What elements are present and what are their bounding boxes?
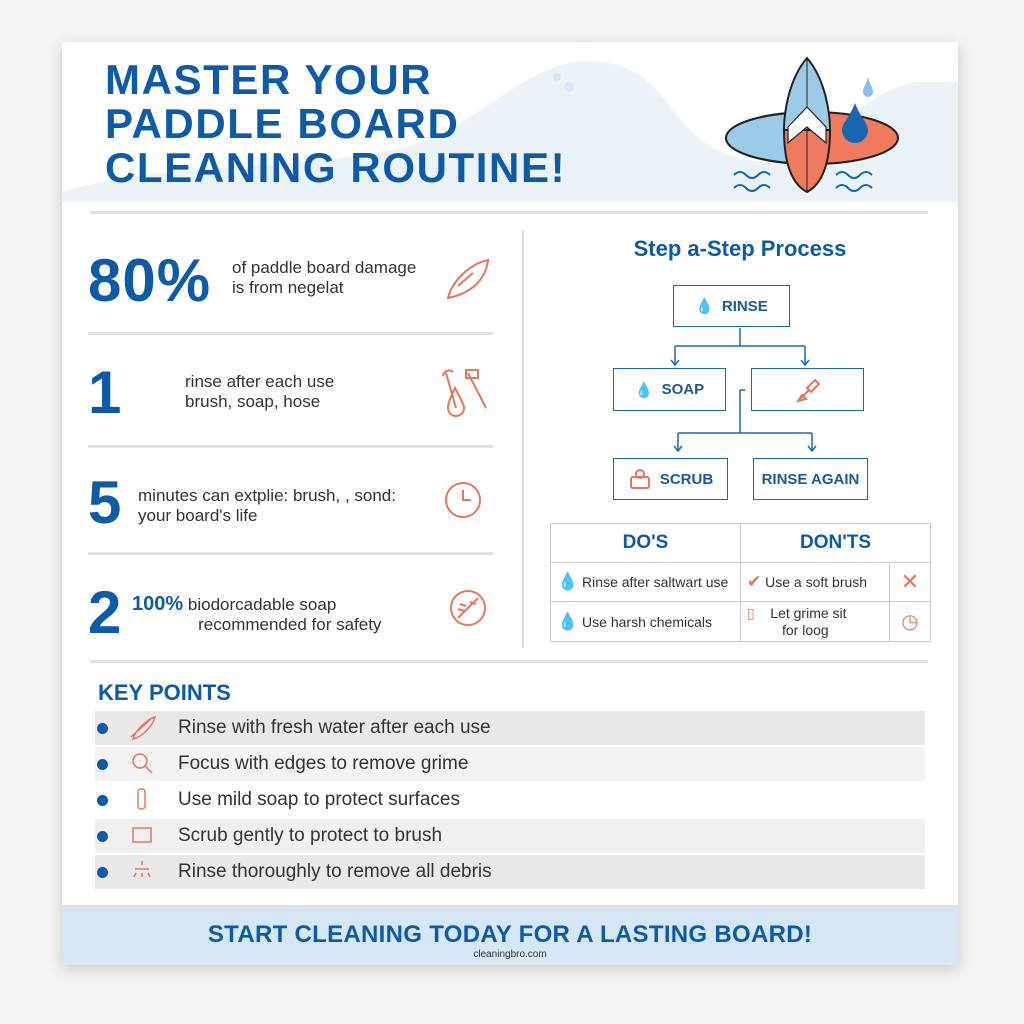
step scrub: SCRUB xyxy=(660,470,713,488)
title xyxy=(105,56,566,191)
heading: step process: Step a-Step Process xyxy=(634,236,846,261)
icon: paddle boards xyxy=(725,56,899,194)
step soap: 💧 xyxy=(635,382,654,398)
table: do's and don'ts: ◷ xyxy=(901,611,919,633)
stat 2: 2 xyxy=(88,579,121,646)
table: do's and don'ts: ▯ Let grime sit xyxy=(747,604,847,620)
step soap xyxy=(613,368,726,411)
step brush xyxy=(751,368,864,411)
step rinse: RINSE xyxy=(722,298,768,314)
table: do's and don'ts: 💧 Use harsh chemicals xyxy=(557,612,712,630)
table: do's and don'ts: ✔ Use a soft brush xyxy=(747,572,867,591)
table: do's and don'ts: ✕ xyxy=(901,569,919,594)
panel: stats: is from negelat xyxy=(232,278,344,297)
stat 5: 5 xyxy=(88,469,121,536)
table: do's and don'ts: for loog xyxy=(782,622,829,638)
step rinse xyxy=(673,285,790,327)
panel: stats: of paddle board damage xyxy=(232,258,416,277)
step rinse again xyxy=(753,458,868,500)
list: key points: Rinse thoroughly to remove all debris xyxy=(178,861,492,882)
panel: stats: brush, soap, hose xyxy=(185,392,320,411)
panel: stats: rinse after each use xyxy=(185,372,334,391)
step rinse again: RINSE AGAIN xyxy=(762,470,859,488)
title: PADDLE BOARD xyxy=(105,100,459,147)
footer text: START CLEANING TODAY FOR A LASTING BOARD! xyxy=(208,921,812,948)
title: CLEANING ROUTINE! xyxy=(105,144,566,191)
divider vertical xyxy=(522,230,524,648)
table: do's and don'ts xyxy=(550,523,931,642)
panel: stats: recommended for safety xyxy=(198,615,381,634)
panel: stats: minutes can extplie: brush, , sond: xyxy=(138,486,396,505)
icons xyxy=(442,258,490,626)
table: do's and don'ts: 💧 Rinse after saltwart use xyxy=(557,572,728,591)
wave background xyxy=(62,61,958,202)
card xyxy=(62,42,958,965)
panel: stats xyxy=(88,247,493,646)
list: key points: Scrub gently to protect to brush xyxy=(178,825,442,846)
title: MASTER YOUR xyxy=(105,56,432,103)
panel: stats: your board's life xyxy=(138,506,257,525)
list: key points: Use mild soap to protect surfaces xyxy=(178,789,460,810)
stat 80%: 80% xyxy=(88,247,211,314)
step soap: SOAP xyxy=(662,381,704,398)
flowchart xyxy=(613,285,868,500)
step scrub xyxy=(613,458,728,500)
list: key points: Focus with edges to remove grime xyxy=(178,753,468,774)
table: do's and don'ts: DON'TS xyxy=(800,532,871,553)
stat 1: 1 xyxy=(88,359,121,426)
heading: key points: KEY POINTS xyxy=(98,680,231,705)
table: do's and don'ts: DO'S xyxy=(623,532,668,553)
step rinse: 💧 xyxy=(695,298,714,315)
footer band xyxy=(62,905,958,965)
list: key points: Rinse with fresh water after each use xyxy=(178,717,491,738)
panel: stats: 100% biodorcadable soap xyxy=(132,593,336,615)
footer band: cleaningbro.com xyxy=(473,949,547,960)
